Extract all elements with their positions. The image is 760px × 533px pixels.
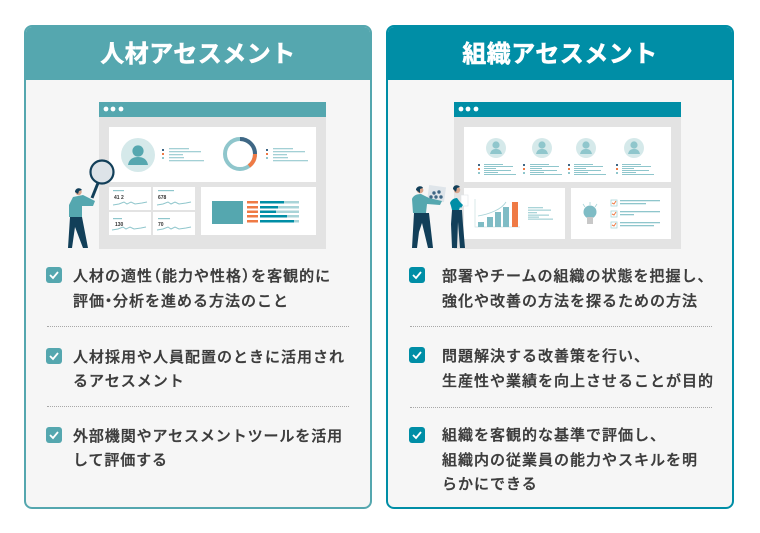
panel: organization assessment — [386, 25, 734, 509]
check icon: talent item 3 — [46, 427, 62, 443]
text: talent item 1 — [73, 268, 331, 310]
text: organization item 1: 強化や改善の方法を探るための方法 — [442, 292, 698, 310]
stat cards: 130 — [115, 222, 124, 228]
idea and checklist card — [571, 188, 671, 239]
heading: talent assessment — [24, 25, 372, 80]
bar list card — [201, 187, 316, 235]
text: organization item 3: 組織を客観的な基準で評価し、 — [442, 427, 666, 444]
text: organization item 3: 組織内の従業員の能力やスキルを明 — [442, 452, 698, 468]
stat cards: 678 — [158, 195, 167, 201]
heading: talent assessment: 人材アセスメント — [100, 41, 296, 68]
text: talent item 2 — [73, 348, 345, 390]
check icon: organization item 3 — [409, 427, 425, 443]
browser window — [99, 102, 326, 249]
profile card with donut chart — [109, 127, 316, 182]
text: talent item 1: 人材の適性（能力や性格）を客観的に — [73, 268, 331, 285]
panel: talent assessment — [24, 25, 372, 509]
text: talent item 2: 人材採用や人員配置のときに活用され — [73, 348, 345, 366]
heading: organization assessment: 組織アセスメント — [462, 41, 658, 68]
stat cards: 70 — [158, 222, 164, 228]
check icon: talent item 2 — [46, 348, 62, 364]
icon: woman holding document — [450, 185, 468, 248]
text: organization item 2 — [442, 348, 714, 390]
check icon: organization item 1 — [409, 267, 425, 283]
bar chart card — [464, 188, 565, 239]
text: organization item 3 — [442, 427, 698, 493]
team members card — [464, 127, 671, 182]
check icon: organization item 2 — [409, 347, 425, 363]
check icon: talent item 1 — [46, 267, 62, 283]
text: organization item 2: 問題解決する改善策を行い、 — [442, 348, 650, 365]
text: talent item 1: 評価・分析を進める方法のこと — [73, 292, 289, 310]
text: organization item 3: らかにできる — [442, 476, 538, 493]
icon: man holding org chart — [412, 185, 446, 248]
text: talent item 3: して評価する — [73, 452, 168, 469]
text: talent item 3 — [73, 428, 343, 469]
browser window — [454, 102, 681, 249]
text: talent item 3: 外部機関やアセスメントツールを活用 — [73, 428, 343, 444]
stat cards: 41 2 — [114, 195, 124, 201]
stat cards — [109, 187, 195, 235]
icon: person with magnifying glass — [68, 160, 114, 248]
text: talent item 2: るアセスメント — [73, 373, 185, 390]
text: organization item 1: 部署やチームの組織の状態を把握し、 — [442, 268, 714, 285]
text: organization item 1 — [442, 268, 714, 310]
heading: organization assessment — [386, 25, 734, 80]
text: organization item 2: 生産性や業績を向上させることが目的 — [442, 372, 714, 390]
